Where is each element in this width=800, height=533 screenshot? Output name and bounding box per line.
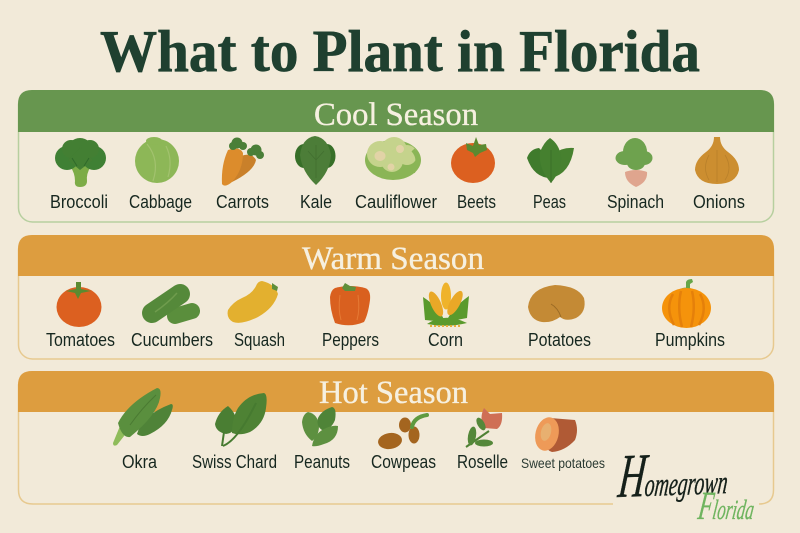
label: Spinach (607, 191, 664, 212)
icon: cauliflower (365, 137, 421, 180)
label: Peppers (322, 329, 379, 350)
label: Kale (300, 191, 332, 212)
label: Roselle (457, 451, 508, 472)
label: Cauliflower (355, 191, 437, 212)
icon: squash (228, 281, 278, 323)
icon: tomato (56, 282, 102, 327)
warm season heading: Warm Season (302, 241, 484, 277)
label: Pumpkins (655, 329, 725, 350)
label: Onions (693, 191, 745, 212)
cool season header (18, 90, 774, 132)
icon: cabbage (135, 137, 179, 183)
icon: corn (423, 282, 469, 326)
icon: broccoli (55, 138, 106, 187)
label: Carrots (216, 191, 269, 212)
label: Beets (457, 191, 496, 212)
label: Peanuts (294, 451, 350, 472)
icon: potatoes (528, 285, 585, 322)
icon: carrots (222, 138, 264, 186)
cool season heading: Cool Season (314, 97, 478, 133)
label: Sweet potatoes (521, 455, 605, 471)
panel: warm season (18, 235, 774, 359)
hot season heading: Hot Season (319, 375, 468, 411)
icon: kale (295, 136, 336, 185)
label: Cowpeas (371, 451, 436, 472)
icon: roselle (466, 408, 502, 447)
label: Cabbage (129, 191, 192, 212)
logo word: Florida: Florida (695, 484, 758, 529)
logo word: Homegrown: Homegrown (615, 439, 732, 512)
label: Peas (533, 191, 566, 212)
icon: sweet potato (532, 415, 577, 453)
icon: peppers (330, 283, 370, 325)
label: Potatoes (528, 329, 591, 350)
label: Swiss Chard (192, 451, 277, 472)
label: Squash (234, 329, 285, 350)
icon: onions (695, 137, 739, 184)
icon: peanuts (302, 407, 338, 446)
label: Broccoli (50, 191, 108, 212)
icon: spinach (616, 138, 652, 187)
label: Cucumbers (131, 329, 213, 350)
icon: swiss chard (215, 393, 267, 446)
panel: hot season (18, 371, 774, 504)
icon: pumpkins (662, 279, 711, 328)
hot season header (18, 371, 774, 412)
label: Tomatoes (46, 329, 115, 350)
label: Okra (122, 451, 158, 472)
warm season header (18, 235, 774, 276)
icon: beets (451, 137, 495, 183)
label: Corn (428, 329, 463, 350)
panel: cool season (18, 90, 774, 222)
icon: cowpeas (377, 415, 427, 451)
logo: Homegrown Florida (615, 439, 758, 529)
icon: okra (113, 388, 173, 446)
icon: peas (527, 138, 574, 183)
title: What to Plant in Florida (100, 18, 700, 84)
icon: cucumbers (152, 293, 192, 316)
